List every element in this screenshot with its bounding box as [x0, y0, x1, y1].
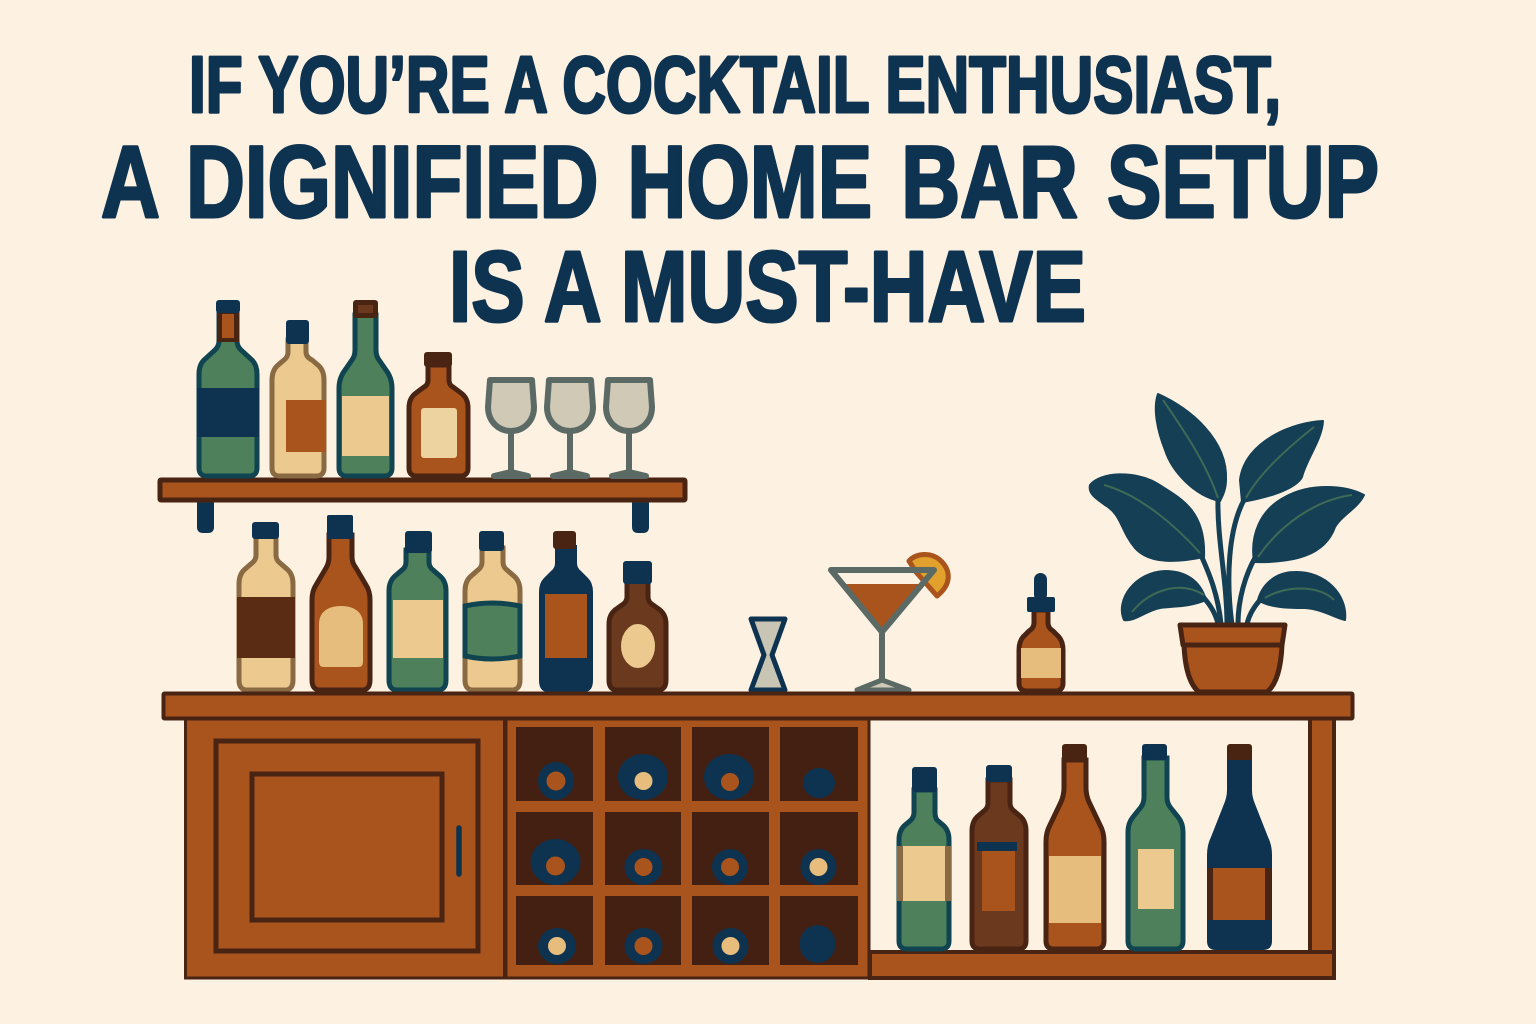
leaves [1090, 394, 1364, 620]
cabinet door [216, 741, 478, 951]
jigger [751, 619, 785, 690]
title: IS A MUST-HAVE [449, 231, 1086, 343]
cabinet body [186, 718, 504, 978]
plant in pot [1090, 394, 1364, 692]
door handle [457, 826, 461, 876]
bottle: green with navy label [197, 300, 259, 476]
leaf veins [1104, 400, 1352, 612]
cream bottle centres [548, 772, 828, 955]
bottle: green tall [1128, 744, 1183, 949]
panel: upper wall shelf with bottles and glasses [160, 300, 685, 533]
bottle: navy with orange label [539, 531, 593, 692]
bottle: green with tan label [339, 300, 392, 476]
counter top [164, 694, 1352, 718]
glass 1 [488, 380, 534, 476]
bottle: brown with orange label [972, 765, 1026, 949]
rack cubbies [516, 727, 858, 965]
bottle: amber flask [409, 352, 468, 476]
orange bottle centres [546, 772, 739, 955]
bottle: amber tall [312, 515, 370, 690]
racked bottle ends [530, 754, 836, 964]
stems [1200, 498, 1260, 625]
wine glasses [488, 380, 652, 476]
bottle: green with tan label [897, 767, 951, 949]
title [101, 40, 1379, 343]
glass 2 [547, 380, 593, 476]
martini cocktail with orange garnish [831, 554, 948, 690]
bottle: amber with tan label [1046, 744, 1104, 949]
bottle: navy with orange label [1207, 744, 1272, 950]
orange slice [909, 554, 948, 596]
glass foot [857, 680, 909, 690]
dropper bottle [1019, 573, 1063, 691]
panel: bar counter [164, 694, 1352, 978]
glass 3 [606, 380, 652, 476]
bottle: brown flask with oval label [609, 561, 666, 690]
bottle: cream with brown label [237, 522, 295, 690]
shelf board [160, 480, 685, 500]
pot [1180, 625, 1285, 692]
wine rack [506, 718, 869, 978]
panel: bottles on lower open shelf [897, 744, 1272, 950]
bottle: green with tan label [389, 531, 446, 690]
bottle: cream with green label [465, 531, 520, 690]
panel: bottles standing on the counter [237, 515, 1063, 692]
cocktail liquid [846, 584, 920, 630]
open section back posts and lower shelf [870, 718, 1334, 978]
shelf brackets [197, 498, 649, 533]
bottle: cream with orange label [272, 320, 326, 476]
glass outline [831, 570, 934, 681]
